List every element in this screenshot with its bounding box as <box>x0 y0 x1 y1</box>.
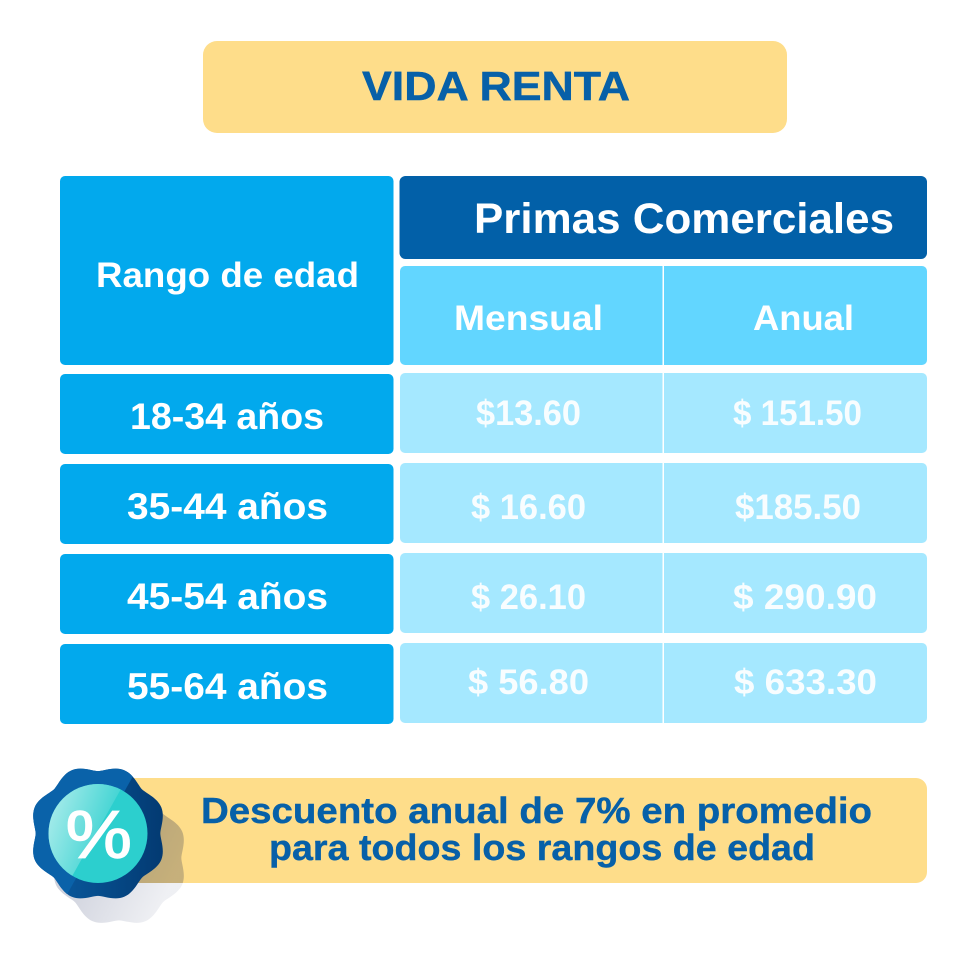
header: age range <box>60 176 394 365</box>
title: VIDA RENTA <box>362 63 630 109</box>
row: 45-54: 45-54 años <box>127 576 328 617</box>
badge body: % <box>66 798 132 872</box>
row: 55-64: 55-64 años <box>127 666 328 707</box>
row: 35-44: 35-44 años <box>127 486 328 527</box>
header: age range: Rango de edad <box>96 256 359 295</box>
discount text: Descuento anual de 7% en promedio <box>201 790 872 831</box>
row: 45-54: $ 26.10 <box>471 578 586 617</box>
row: 35-44: $185.50 <box>735 488 861 527</box>
row: 45-54: $ 290.90 <box>733 578 877 617</box>
row: 35-44 <box>60 463 927 544</box>
row: 35-44: $ 16.60 <box>471 488 586 527</box>
header: monthly <box>400 266 662 365</box>
discount banner: para todos los rangos de edad <box>269 827 815 868</box>
badge body <box>33 768 163 898</box>
row: 55-64: $ 56.80 <box>468 663 589 702</box>
header: annual: Anual <box>753 299 854 338</box>
row: 18-34: $ 151.50 <box>733 394 862 433</box>
row: 18-34: $13.60 <box>476 394 581 433</box>
row: 55-64 <box>60 643 927 724</box>
row: 18-34: 18-34 años <box>130 396 324 437</box>
row: 55-64: $ 633.30 <box>734 663 877 702</box>
header: annual <box>664 266 927 365</box>
title banner <box>203 41 787 133</box>
icon: percent badge <box>28 764 184 923</box>
discount banner <box>120 778 927 883</box>
badge shadow <box>54 814 184 923</box>
header: commercial premiums <box>400 176 927 259</box>
header: commercial premiums: Primas Comerciales <box>474 195 894 243</box>
premium table <box>60 176 927 724</box>
row: 18-34 <box>60 373 927 454</box>
header: monthly: Mensual <box>454 299 603 338</box>
row: 45-54 <box>60 553 927 634</box>
